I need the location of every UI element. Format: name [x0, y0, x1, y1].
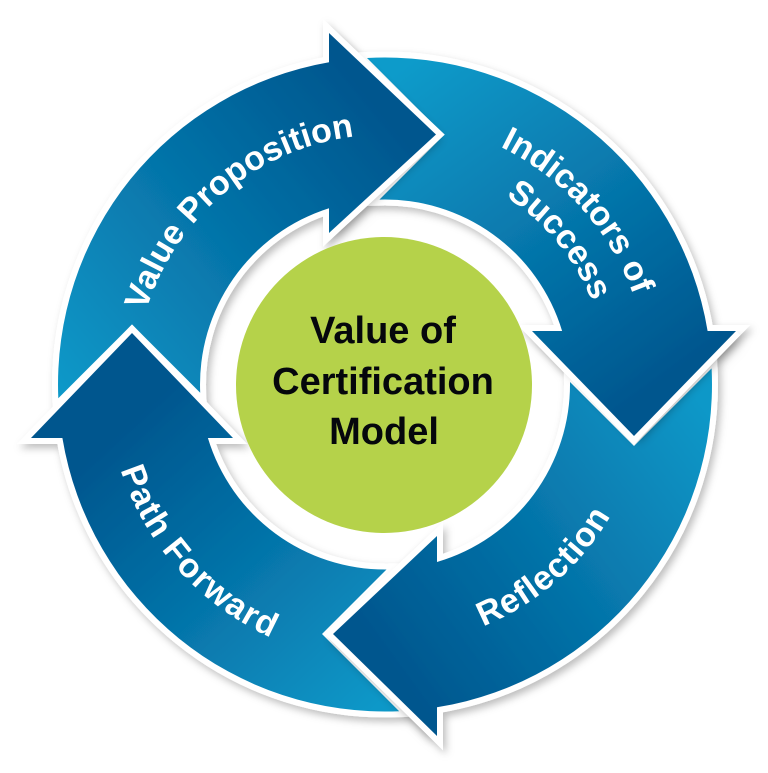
- arrow: Indicators of Success: [358, 51, 754, 354]
- arrow: Value Proposition: Value Proposition: [124, 119, 352, 304]
- arrow head overlay: Indicators of Success head over Reflection tail: [532, 331, 740, 442]
- center circle: Value of Certification Model: [236, 237, 532, 533]
- arrow: Indicators of Success: Success: [509, 181, 606, 298]
- center title: Value of: [310, 310, 456, 352]
- arrow: Reflection: Reflection: [475, 510, 610, 626]
- center title: Model: [329, 411, 439, 453]
- arrow: Indicators of Success: Indicators of: [502, 126, 656, 292]
- arrow: Path Forward: Path Forward: [121, 464, 280, 637]
- center title: Certification: [272, 361, 494, 403]
- arrow: Value Proposition: [50, 22, 445, 407]
- arrow: Path Forward: [20, 324, 412, 726]
- arrow: Reflection: [328, 359, 726, 754]
